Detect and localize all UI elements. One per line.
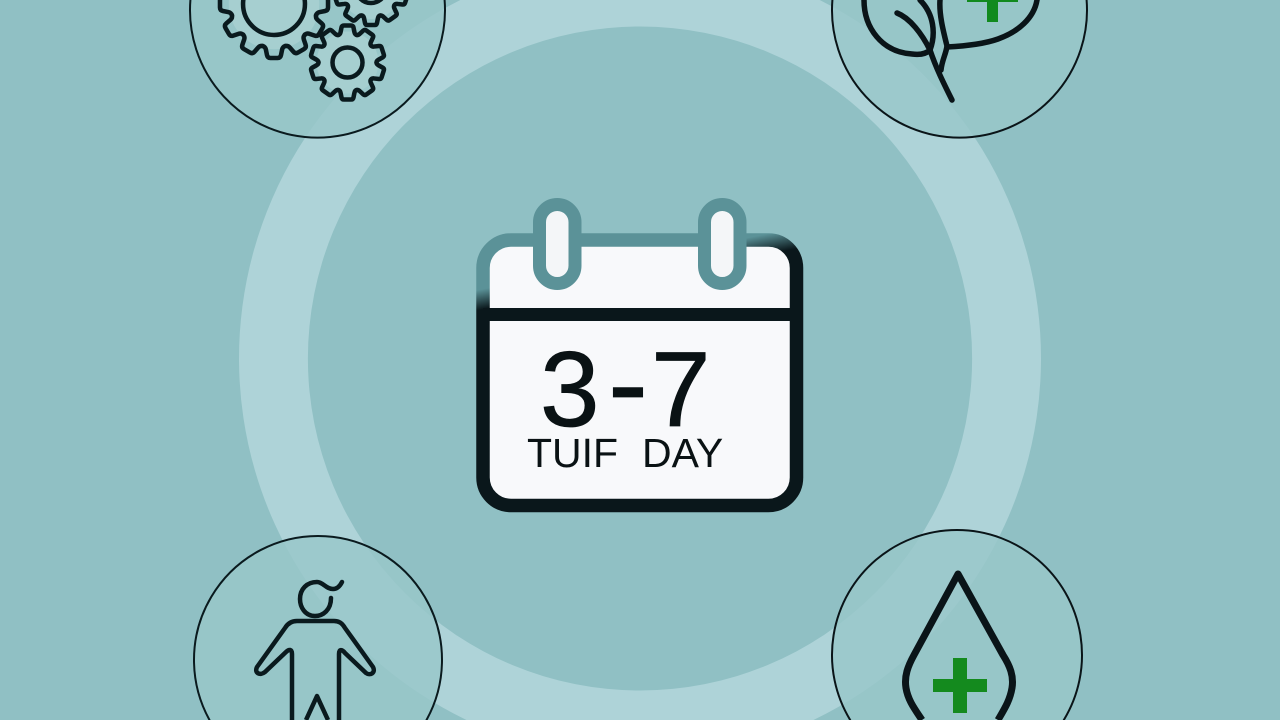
calendar number: - [608,316,648,450]
icon circle: person [194,536,442,720]
calendar [483,204,797,506]
icon: person figure [256,582,374,720]
icon: green plus [933,658,987,713]
icon: leaf [864,0,1037,100]
background ring [239,0,1041,720]
icon: upper small gear [333,0,409,25]
icon circle: water drop with plus [832,530,1082,720]
calendar header divider [483,308,797,321]
calendar binding ring: right [704,204,740,284]
icon: lower small gear [310,26,385,100]
icon: green plus [967,0,1018,22]
calendar body [483,240,796,506]
calendar label: DAY [642,430,723,476]
calendar number: 7 [651,329,711,449]
icon circle: gears [190,0,445,138]
calendar binding ring: left [540,204,575,284]
calendar number: 3 [540,329,600,449]
icon: large gear [220,0,328,58]
calendar label: TUIF [527,430,618,476]
icon: water drop [905,574,1013,720]
icon circle: leaf with plus [832,0,1087,138]
